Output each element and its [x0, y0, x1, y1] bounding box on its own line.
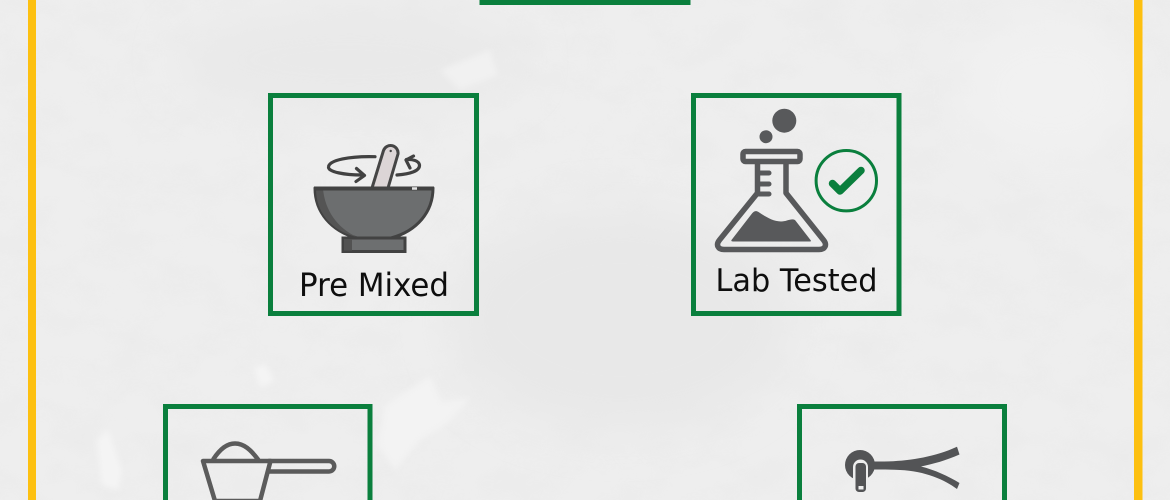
icon: green check badge — [816, 150, 876, 211]
panel frame — [800, 406, 1004, 500]
left yellow border bar — [28, 0, 36, 500]
panel: measuring scoop — [166, 406, 370, 500]
panel frame — [270, 96, 476, 314]
panel frame — [166, 406, 370, 500]
label: Pre Mixed: Pre Mixed — [299, 266, 449, 304]
right yellow border bar — [1134, 0, 1142, 500]
panel: Lab Tested — [694, 96, 899, 314]
icon: measuring scoop — [203, 444, 334, 500]
panel frame — [694, 96, 899, 314]
green title box bottom edge — [480, 0, 690, 5]
panel: clip and wires — [800, 406, 1004, 500]
icon: mortar and pestle — [314, 146, 434, 252]
label: Lab Tested: Lab Tested — [716, 263, 878, 299]
icon: flask with bubbles — [718, 109, 825, 250]
panel: Pre Mixed — [270, 96, 476, 314]
icon: clip with forked strap — [845, 447, 960, 492]
